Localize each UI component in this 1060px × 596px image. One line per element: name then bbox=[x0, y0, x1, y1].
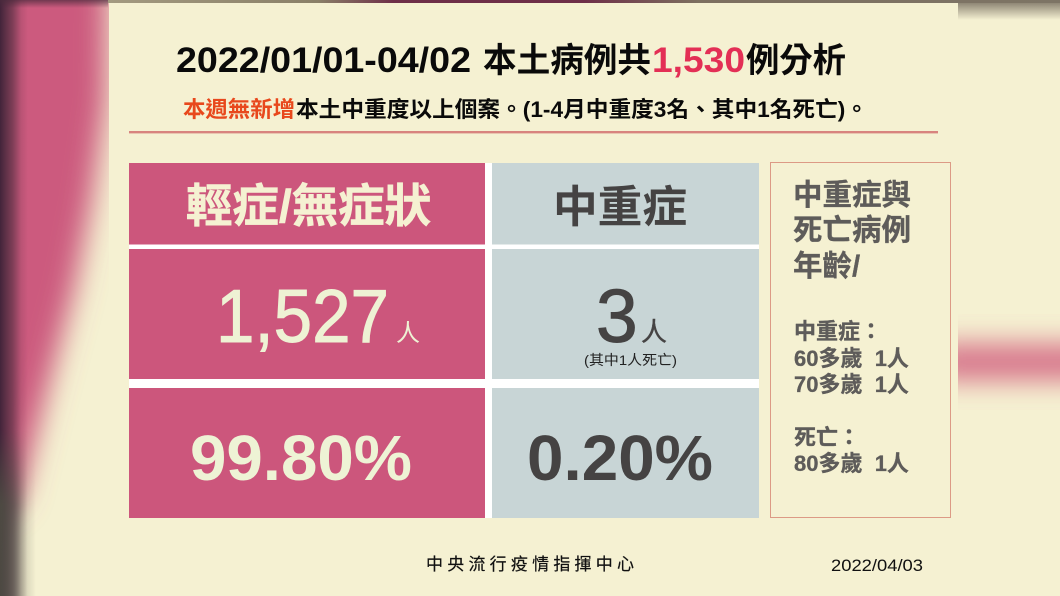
cell: severe percent bbox=[492, 388, 759, 518]
cell: mild percent: 99.80% bbox=[190, 422, 412, 494]
side panel: age breakdown: 80多歲 1人 bbox=[794, 451, 909, 476]
title: 例分析 bbox=[746, 42, 846, 80]
cell: mild count: 1,527 bbox=[216, 274, 389, 358]
title: 1,530 bbox=[652, 41, 745, 80]
title: 2022/01/01-04/02 bbox=[176, 41, 471, 80]
column header: mild / asymptomatic: 輕症/無症狀 bbox=[186, 180, 431, 232]
side panel: age breakdown: 60多歲 1人 bbox=[794, 346, 909, 371]
cell: severe percent: 0.20% bbox=[527, 422, 713, 494]
column header: moderate to severe bbox=[492, 163, 759, 244]
cell: severe count: (其中1人死亡) bbox=[584, 352, 677, 368]
cell: severe count bbox=[492, 249, 759, 379]
title rule bbox=[129, 131, 938, 133]
cell: severe count: 3 bbox=[596, 274, 638, 358]
cell: mild percent bbox=[129, 388, 485, 518]
subtitle: 本週無新增 bbox=[183, 97, 295, 122]
side panel: age breakdown: 死亡： bbox=[794, 425, 860, 450]
footer: agency name: 中央流行疫情指揮中心 bbox=[426, 555, 634, 574]
title: 本土病例共 bbox=[483, 42, 651, 80]
side panel: age breakdown: 70多歲 1人 bbox=[794, 372, 909, 397]
side panel: age breakdown: 年齡/ bbox=[793, 250, 860, 283]
side panel: age breakdown: 中重症與 bbox=[793, 179, 911, 212]
cell: mild count bbox=[129, 249, 485, 379]
cell: mild count: 人 bbox=[396, 320, 420, 347]
side panel: age breakdown bbox=[770, 162, 950, 518]
cell: severe count: 人 bbox=[641, 317, 667, 347]
column header: mild / asymptomatic bbox=[129, 163, 485, 244]
side panel: age breakdown: 中重症： bbox=[794, 319, 882, 344]
column header: moderate to severe: 中重症 bbox=[553, 183, 687, 232]
title bbox=[176, 41, 846, 80]
main cream panel bbox=[109, 3, 958, 596]
subtitle: 本土中重度以上個案。(1-4月中重度3名、其中1名死亡)。 bbox=[296, 97, 868, 122]
white table backing bbox=[129, 163, 759, 518]
footer: date: 2022/04/03 bbox=[831, 556, 923, 575]
side panel: age breakdown: 死亡病例 bbox=[793, 214, 911, 247]
